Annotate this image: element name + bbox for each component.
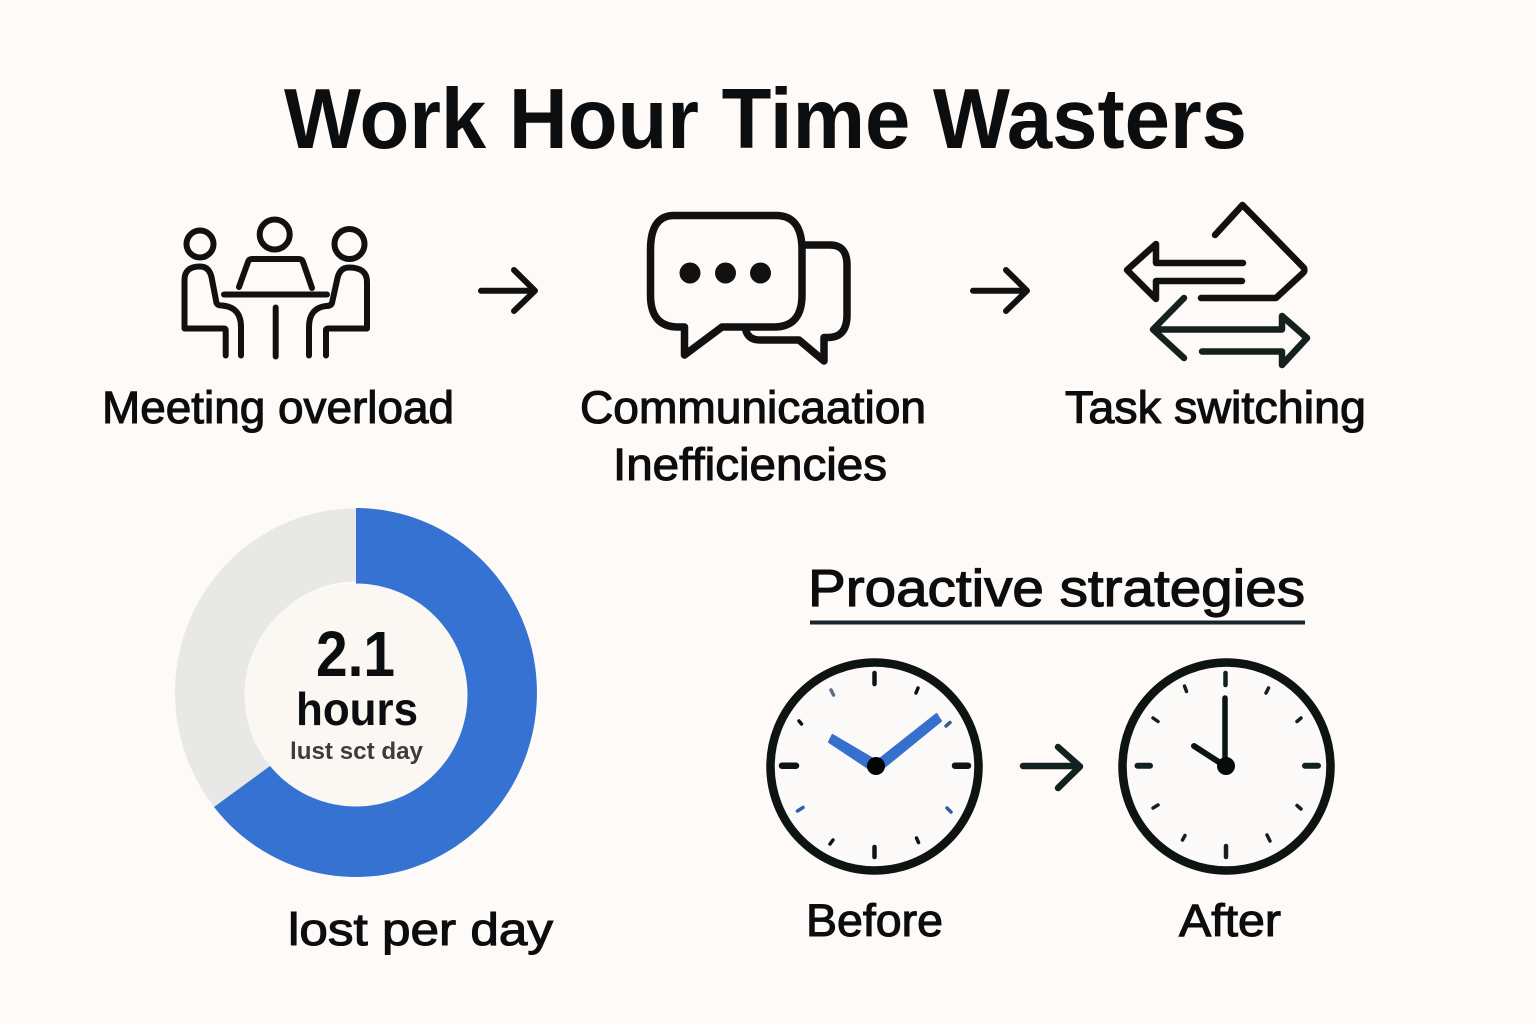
before clock hands <box>829 714 941 775</box>
arrow: before to after <box>1023 747 1080 788</box>
title: Work Hour Time Wasters <box>284 72 1247 167</box>
label: after: After <box>1179 895 1281 946</box>
icon: chat bubbles <box>650 216 847 361</box>
label: communication inefficiencies <box>580 382 926 490</box>
heading: proactive strategies: Proactive strategies <box>808 560 1305 618</box>
donut unit: hours <box>296 683 418 735</box>
after clock hands <box>1194 698 1235 775</box>
arrow: communication to task switching <box>973 270 1027 311</box>
label: communication inefficiencies: Communicaation <box>580 382 926 433</box>
donut small caption: lust sct day <box>290 738 424 765</box>
label: meeting overload: Meeting overload <box>102 382 454 433</box>
donut value: 2.1 <box>316 618 395 690</box>
arrow: meeting to communication <box>481 270 535 311</box>
clock: after <box>1122 662 1330 870</box>
icon: meeting <box>184 220 367 356</box>
label: communication inefficiencies: Inefficiencies <box>613 439 887 490</box>
label: task switching: Task switching <box>1065 382 1366 433</box>
clock: before <box>770 662 978 870</box>
icon: task switching arrows <box>1127 205 1307 365</box>
label: lost per day: lost per day <box>288 904 554 955</box>
label: before: Before <box>806 895 943 946</box>
donut chart <box>212 508 537 877</box>
